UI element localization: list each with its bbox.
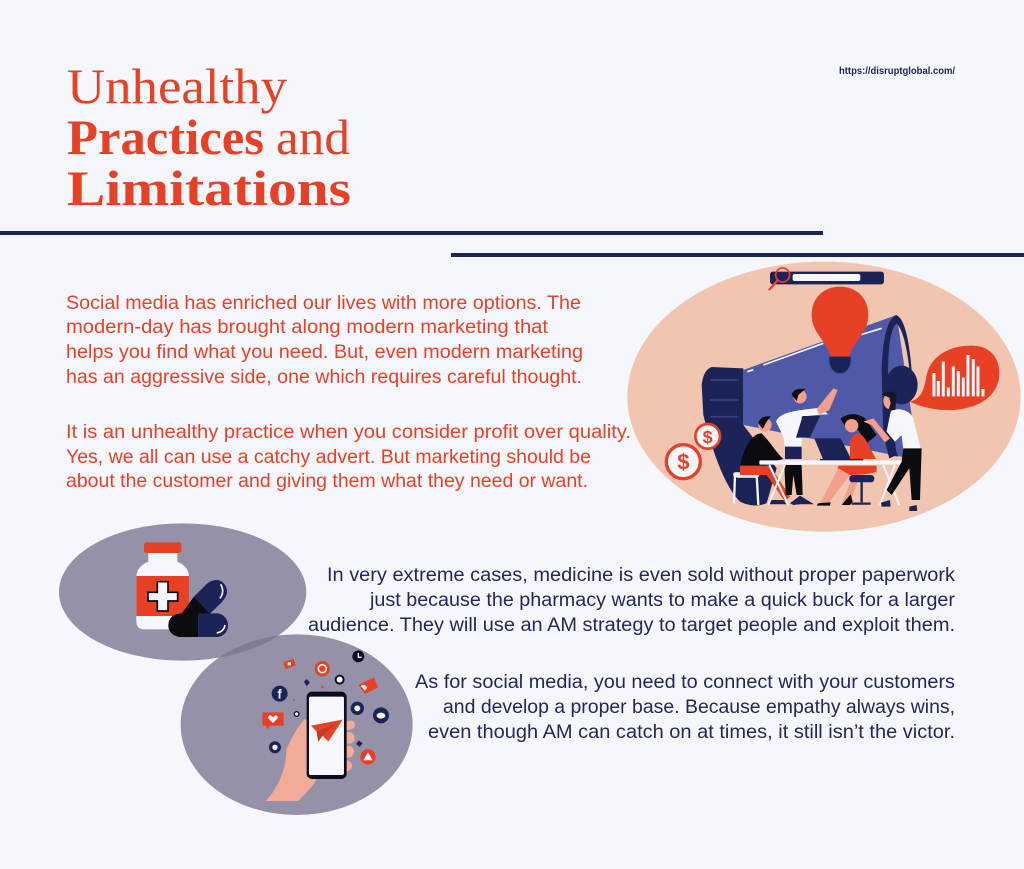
text block: empathy: and develop a proper base. Because empathy always wins,: [443, 697, 955, 718]
text block: empathy: [415, 672, 955, 743]
icon: speech bubble with bar chart: [910, 346, 999, 410]
title: Limitations: [67, 160, 351, 216]
icon: light bulb: [812, 287, 868, 373]
icon: hand: [266, 719, 355, 801]
text block: medicine: just because the pharmacy wants to make a quick buck for a larger: [369, 590, 956, 611]
icon: social media badges: f: [278, 688, 283, 702]
icon: capsules: [168, 580, 228, 637]
illustration: medicine bottle and capsules: [59, 523, 306, 661]
illustration: phone and social media icons: [181, 634, 413, 815]
text block: medicine: In very extreme cases, medicine is even sold without proper paperwork: [327, 565, 956, 586]
text block: medicine: [308, 565, 956, 636]
icon: smartphone: [307, 692, 347, 779]
title: [67, 58, 351, 216]
text block: social media intro: modern-day has brought along modern marketing that: [66, 317, 549, 338]
table and team: [733, 388, 922, 511]
title: Unhealthy: [67, 58, 287, 114]
icon: social media badges: [262, 650, 389, 765]
text block: social media intro: has an aggressive side, one which requires careful thought.: [66, 367, 582, 388]
source url: https://disruptglobal.com/: [839, 66, 955, 77]
text block: unhealthy practice: It is an unhealthy practice when you consider profit over quality.: [66, 422, 631, 443]
icon: dollar coins: $: [677, 449, 689, 474]
icon: dollar coins: $: [703, 427, 713, 447]
text block: social media intro: helps you find what you need. But, even modern marketing: [66, 342, 583, 363]
title: and: [276, 109, 350, 165]
icon: medicine bottle: [136, 542, 189, 629]
icon: search bar: [769, 268, 884, 290]
text block: unhealthy practice: about the customer and giving them what they need or want.: [66, 471, 588, 492]
text block: social media intro: [66, 293, 583, 388]
icon: megaphone: [702, 315, 918, 505]
text block: empathy: even though AM can catch on at times, it still isn’t the victor.: [428, 722, 955, 743]
illustration: marketing team and megaphone: [627, 262, 1021, 532]
title: Practices: [67, 109, 264, 165]
icon: dollar coins: [666, 424, 720, 479]
text block: unhealthy practice: Yes, we all can use a catchy advert. But marketing should be: [66, 447, 591, 468]
text block: medicine: audience. They will use an AM strategy to target people and exploit them.: [308, 615, 955, 636]
text block: empathy: As for social media, you need to connect with your customers: [415, 672, 955, 693]
text block: social media intro: Social media has enriched our lives with more options. The: [66, 293, 581, 314]
text block: unhealthy practice: [66, 422, 631, 492]
